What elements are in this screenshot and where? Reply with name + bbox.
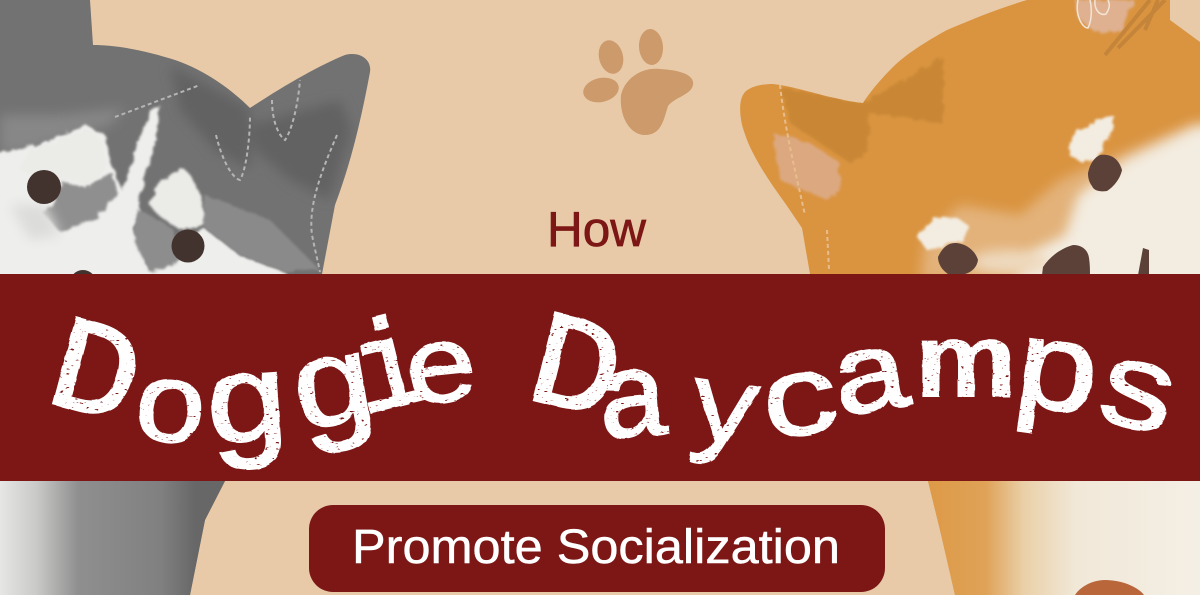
paw main pad [621,69,693,135]
title: Doggie Daycamps: g [198,334,295,483]
subtitle text: Promote Socialization [352,521,840,574]
shiba mouth [1138,248,1149,275]
shiba tongue [1075,580,1144,595]
title: Doggie Daycamps: D [32,293,156,463]
husky fur base [0,0,380,595]
shiba muzzle tan [920,120,1200,280]
illustration: gray husky dog [0,0,380,595]
shiba darker ear shade [780,57,943,163]
title: Doggie Daycamps: i [337,295,445,451]
banner [0,274,1200,481]
title: Doggie Daycamps: a [593,334,675,475]
shiba left eye [938,243,978,274]
shiba right brow [1067,115,1113,163]
title: Doggie Daycamps: c [752,336,852,474]
title: Doggie Daycamps: p [1004,299,1110,453]
shiba ear highlight line [780,85,829,270]
husky right eye patch [134,208,182,272]
husky right eye [172,230,204,262]
husky fur shading [174,72,350,196]
title: Doggie Daycamps [32,288,1193,483]
shiba inner ear [773,133,840,200]
title: Doggie Daycamps: a [821,312,923,451]
husky ear scratch lines [115,80,337,272]
title: Doggie Daycamps: D [513,288,636,459]
shiba right eye [1088,155,1122,191]
husky cheek speckled fur [205,195,320,272]
pill background [309,505,885,592]
husky forehead lighter fur [0,108,118,152]
husky white brow left [39,136,98,184]
shiba top head marking [1075,0,1135,32]
shiba head stripes [1105,0,1165,55]
husky lower body [0,481,230,595]
shiba muzzle cream [970,250,1050,274]
shiba cream face [1011,116,1200,274]
title: Doggie Daycamps: g [279,314,388,470]
title: Doggie Daycamps: e [397,308,485,438]
paw toe left [581,75,621,105]
husky white brow right [150,170,205,230]
husky white face [0,105,288,274]
title: Doggie Daycamps: o [124,342,216,480]
paw toe middle right [638,28,664,66]
title: Doggie Daycamps: s [1080,320,1193,472]
husky left eye [27,170,61,204]
heading: How: How [547,203,647,257]
shiba nose [1042,245,1090,275]
title: Doggie Daycamps: y [679,346,769,481]
illustration: orange shiba dog [730,0,1200,595]
husky left cheek shade [10,205,60,240]
shiba fur base [730,0,1200,595]
shiba head outline scribble [1077,0,1109,28]
paw toe middle left [595,38,627,76]
icon: paw print [581,28,693,135]
husky nose [74,270,92,274]
title: Doggie Daycamps: m [915,311,1017,428]
shiba lower body [925,481,1200,595]
husky left eye patch [45,172,118,232]
subtitle pill [309,505,885,592]
shiba left brow [917,217,970,250]
